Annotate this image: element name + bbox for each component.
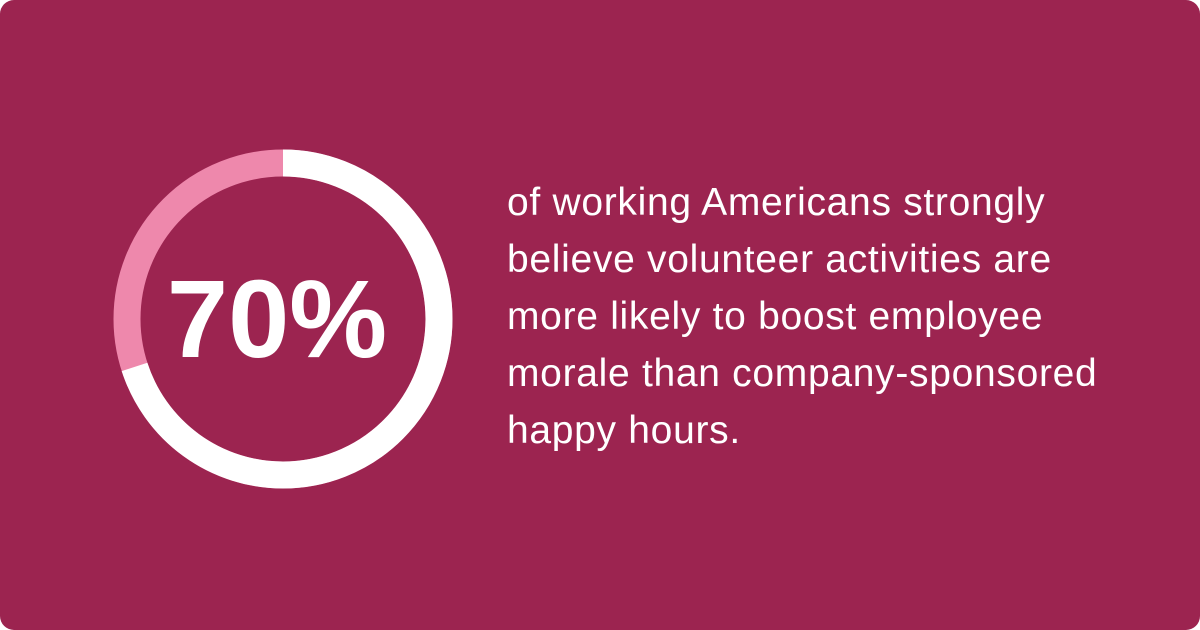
text block: description bbox=[507, 181, 1097, 452]
text block: description: of working Americans strongly bbox=[507, 181, 1045, 224]
chart: donut ring 70% bbox=[114, 150, 452, 488]
text block: description: believe volunteer activities are bbox=[507, 238, 1052, 281]
text block: description: happy hours. bbox=[507, 409, 741, 452]
text block: description: morale than company-sponsored bbox=[507, 352, 1097, 395]
text block: description: more likely to boost employee bbox=[507, 295, 1043, 338]
chart: donut ring 70%: 70% bbox=[167, 258, 387, 381]
